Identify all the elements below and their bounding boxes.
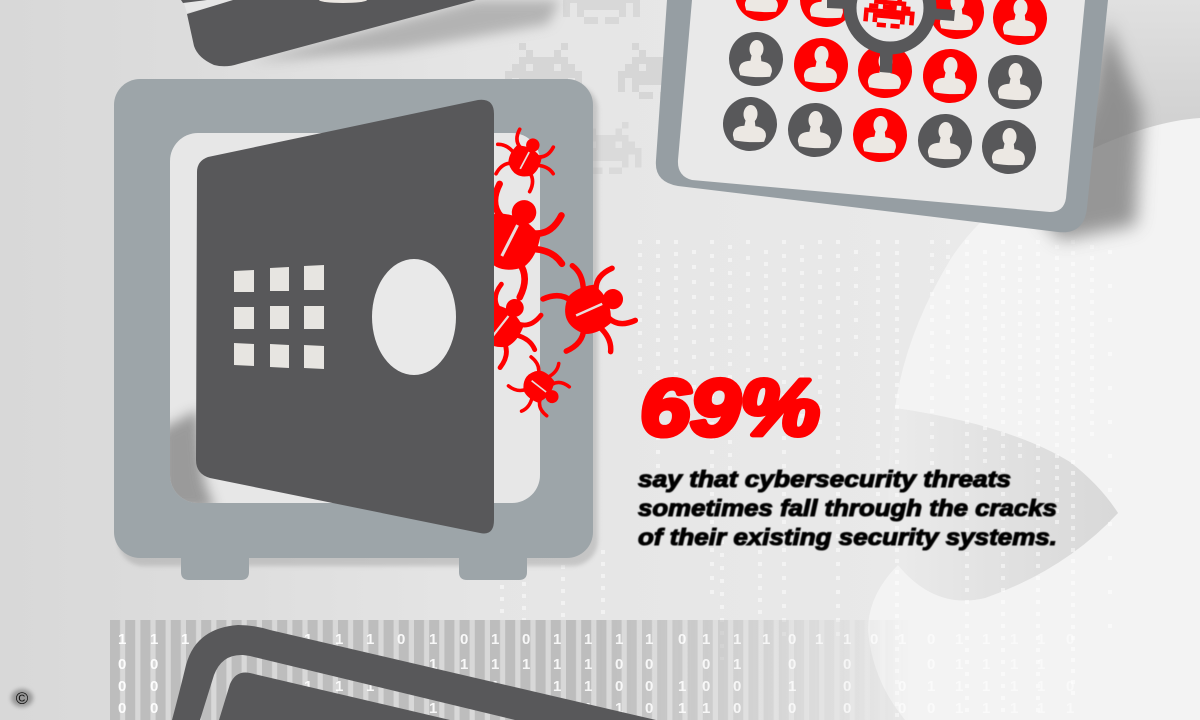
tablet (656, 0, 1108, 232)
binary stripes (110, 620, 910, 720)
description text (638, 466, 1057, 550)
card highlight (319, 0, 367, 3)
shadow gradient (170, 406, 220, 503)
door keypad (234, 265, 324, 369)
user icon (734, 0, 790, 22)
bug: bottom (501, 348, 577, 425)
user icon (857, 43, 913, 99)
magnifier (827, 0, 955, 73)
space invader: top (563, 0, 640, 24)
description text: of their existing security systems. (638, 524, 1057, 550)
user icon (922, 48, 978, 104)
user icon (799, 0, 855, 28)
magnifier cross handles (827, 0, 955, 73)
binary digits (118, 631, 1074, 717)
user icon (864, 0, 920, 34)
safe feet (181, 550, 527, 580)
bug: top (485, 123, 564, 197)
safe (114, 79, 643, 580)
card outer frame (172, 625, 656, 720)
user icon (852, 107, 908, 163)
safe shadow (118, 84, 598, 566)
card: top left (181, 0, 476, 66)
user grid row 2 (728, 31, 1043, 110)
bug: right (535, 251, 643, 368)
copyright badge (11, 689, 33, 708)
binary digits: 0011110110000011111 (118, 700, 1074, 717)
card inner panel (219, 672, 450, 720)
user icon (987, 54, 1043, 110)
safe opening (170, 133, 540, 503)
door handle (372, 259, 456, 375)
user icon (722, 96, 778, 152)
space invader in magnifier (863, 0, 916, 30)
space invader: right of safe (618, 43, 695, 99)
description text: sometimes fall through the cracks (638, 495, 1057, 521)
binary digits: 111111010101111011101101011110 (118, 631, 1074, 648)
user icon (728, 31, 784, 87)
user grid row 3 (722, 96, 1037, 175)
binary digits: 0011111100010001111 (118, 656, 1045, 673)
background: light swoosh shape (868, 118, 1200, 720)
background: falling digit dots (502, 240, 1110, 720)
card shadow: top (250, 0, 560, 62)
user icon (992, 0, 1048, 46)
card body (187, 0, 476, 66)
tablet shadow (1040, 20, 1142, 240)
background: top right grey shade (1085, 0, 1200, 170)
binary panel (110, 620, 851, 720)
copyright symbol: © (16, 689, 29, 708)
tablet screen (678, 0, 1085, 212)
user icon (787, 102, 843, 158)
magnifier ring (850, 0, 930, 48)
tablet frame (656, 0, 1108, 232)
space invader: behind safe (505, 43, 582, 99)
space invader: lower right of safe (570, 122, 642, 174)
user icon (793, 37, 849, 93)
bug: large (438, 174, 581, 307)
badge glow (11, 689, 33, 707)
user grid row 1 (734, 0, 1048, 46)
card top edge (181, 0, 207, 3)
description text: say that cybersecurity threats (638, 466, 1011, 492)
user icon (929, 0, 985, 40)
safe door (196, 100, 494, 533)
door shadow on the opening (170, 406, 220, 503)
bottom card (172, 625, 656, 720)
statistic: 69%: 69% (640, 363, 820, 452)
user icon (917, 113, 973, 169)
binary digits: 00111111100100100111110 (118, 678, 1074, 695)
safe body (114, 79, 593, 558)
background: grey leaf shape (888, 408, 1118, 601)
card stripe (183, 0, 236, 13)
bug: middle (448, 274, 554, 378)
user icon (981, 119, 1037, 175)
